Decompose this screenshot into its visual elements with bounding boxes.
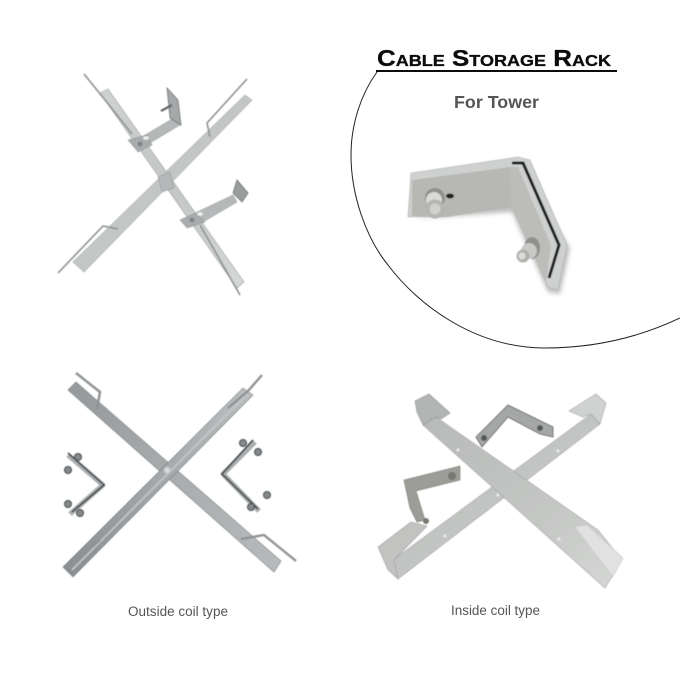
rack arm: upper-left to lower-right xyxy=(100,89,244,288)
subtitle: For Tower: For Tower xyxy=(454,92,539,112)
bracket black gasket xyxy=(512,163,559,278)
outside coil rods xyxy=(68,373,296,568)
inside coil holes xyxy=(444,448,560,540)
inside coil hook: top-left xyxy=(415,394,450,425)
bracket bolt: left xyxy=(425,188,454,218)
bracket photo: for tower xyxy=(408,157,570,294)
callout arc xyxy=(351,72,680,348)
title: Cable Storage Rack xyxy=(377,45,611,71)
outside coil right bracket xyxy=(222,440,270,511)
inside coil upper bracket xyxy=(476,405,553,447)
outside coil arm: upper-left to lower-right xyxy=(68,382,281,572)
rack photo: outside coil type xyxy=(63,373,296,577)
inside coil arm: lower-left to upper-right xyxy=(393,414,600,579)
bracket inner face xyxy=(412,167,512,217)
outside coil arm: lower-left to upper-right xyxy=(63,388,253,577)
outside coil centre bolts xyxy=(164,467,170,473)
rack photo: inside coil type xyxy=(378,394,623,588)
rack centre plate xyxy=(158,172,174,192)
inside coil hook: top-right xyxy=(569,394,606,424)
rack photo: top-left assembled rack xyxy=(58,74,252,295)
inside coil left bracket xyxy=(404,466,460,524)
bracket bolt: right xyxy=(516,237,540,262)
lower bracket xyxy=(180,180,248,228)
upper bracket xyxy=(128,88,181,152)
caption: inside coil type: Inside coil type xyxy=(451,603,540,618)
inside coil end block xyxy=(575,525,623,577)
caption: outside coil type: Outside coil type xyxy=(128,604,228,619)
outside coil ridge xyxy=(72,393,248,570)
bracket shadow xyxy=(415,200,570,294)
rack rods xyxy=(58,74,247,295)
outside coil left bracket xyxy=(64,453,104,516)
rack arm: lower-left to upper-right xyxy=(73,95,252,272)
inside coil left loop xyxy=(378,522,427,579)
inside coil arm: upper-left to lower-right xyxy=(423,417,622,588)
bracket body xyxy=(408,157,567,290)
